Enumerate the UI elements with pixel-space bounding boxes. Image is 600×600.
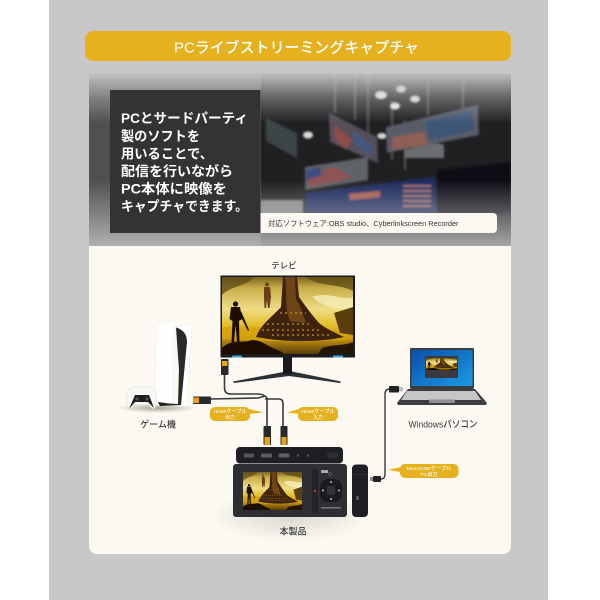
connector: output HDMI: [264, 426, 271, 445]
callout: HDMI input: 入力: [313, 414, 323, 421]
callout: HDMI input: [287, 407, 338, 421]
callout: HDMI output: 出力: [225, 414, 235, 421]
callout: MicroUSB: MicroUSBケーブル: [406, 465, 452, 472]
icon: product front: [233, 464, 347, 517]
connector: TV HDMI: [221, 359, 228, 375]
callout: MicroUSB: PC出力: [420, 471, 438, 478]
icon: product side: [352, 464, 368, 517]
label: product: 本製品: [279, 526, 307, 536]
icon: TV monitor: [220, 276, 355, 383]
label: Windows PC: Windowsパソコン: [408, 420, 478, 430]
caption: supported software: 対応ソフトウェア:OBS studio、Cyberlinkscreen Recorder: [268, 219, 459, 228]
photo: ceiling rigging and lights: [266, 73, 463, 170]
callout text: [121, 111, 248, 214]
panel: event photo background: [89, 73, 511, 246]
label: game console: ゲーム機: [140, 418, 176, 430]
callout text: 用いることで、: [121, 146, 213, 162]
callout: HDMI output: HDMIケーブル: [214, 408, 247, 415]
label: TV: テレビ: [271, 260, 297, 270]
USB cable: [370, 386, 403, 482]
icon: laptop: [397, 348, 487, 405]
connector: input HDMI: [280, 426, 288, 445]
callout text: キャプチャできます。: [121, 199, 248, 214]
panel: connection diagram: [89, 246, 511, 554]
callout: HDMI output: [210, 407, 264, 421]
callout: dark text box: [110, 90, 260, 233]
icon: game console: [117, 320, 197, 413]
caption: supported software: [260, 213, 497, 233]
photo: hanging game screens: [305, 105, 479, 190]
callout: MicroUSB: [388, 464, 458, 478]
callout text: 配信を行いながら: [121, 163, 233, 179]
title banner: [85, 31, 511, 61]
title banner: PCライブストリーミングキャプチャ: [174, 38, 419, 56]
photo: fade overlays: [89, 73, 511, 246]
connector: console HDMI: [193, 396, 211, 404]
callout text: PCとサードパーティ: [121, 111, 248, 126]
callout text: 製のソフトを: [121, 129, 200, 144]
icon: product back panel: [236, 447, 343, 464]
callout text: PC本体に映像を: [121, 180, 227, 196]
photo: blue scoreboard: [260, 162, 511, 214]
icon: game controller: [126, 387, 156, 409]
callout: HDMI input: HDMIケーブル: [302, 408, 335, 415]
HDMI cables: [211, 374, 283, 428]
